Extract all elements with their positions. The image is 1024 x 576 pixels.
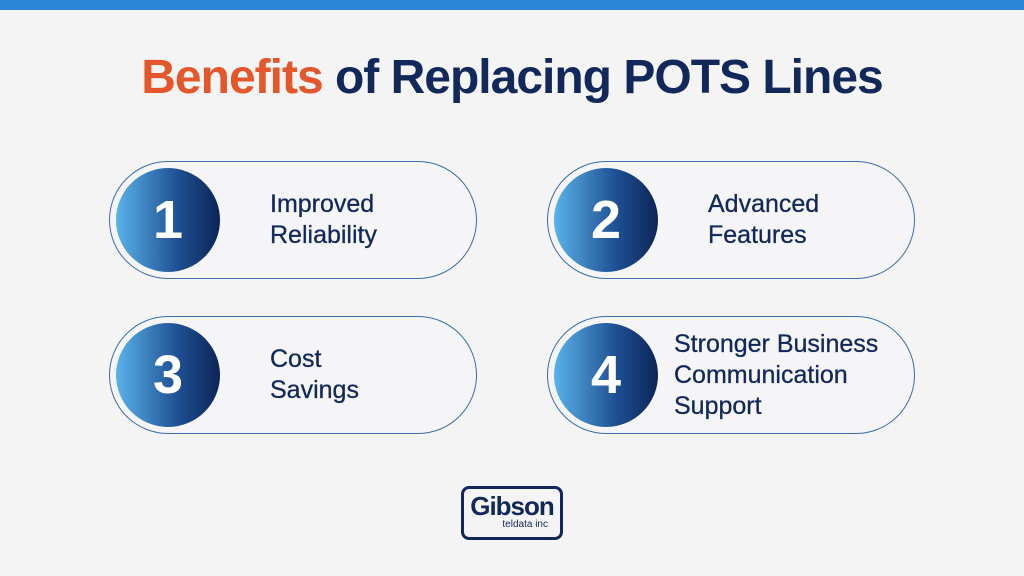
panel: improved reliability: Reliability bbox=[270, 221, 377, 249]
panel: cost savings: 3 bbox=[153, 345, 183, 405]
panel: improved reliability: 1 bbox=[153, 190, 183, 250]
panel: stronger business communication: 4 bbox=[591, 345, 621, 405]
panel: advanced features bbox=[547, 161, 915, 279]
panel: stronger business communication: Communication bbox=[674, 360, 848, 388]
panel: advanced features: 2 bbox=[591, 190, 621, 250]
panel: cost savings: Savings bbox=[270, 376, 359, 404]
panel: improved reliability: Improved bbox=[270, 190, 374, 218]
panel: advanced features: Features bbox=[708, 221, 807, 249]
logo: teldata inc bbox=[502, 519, 548, 530]
panel: advanced features: Advanced bbox=[708, 190, 819, 218]
panel: stronger business communication: Stronger Business bbox=[674, 330, 878, 358]
logo: Gibson bbox=[470, 491, 554, 521]
panel: improved reliability bbox=[109, 161, 477, 279]
panel: stronger business communication: Support bbox=[674, 392, 762, 420]
panel: stronger business communication bbox=[547, 316, 915, 434]
logo bbox=[461, 486, 563, 540]
panel: cost savings: Cost bbox=[270, 345, 321, 373]
title: Benefits of Replacing POTS Lines bbox=[141, 51, 883, 104]
panel: cost savings bbox=[109, 316, 477, 434]
